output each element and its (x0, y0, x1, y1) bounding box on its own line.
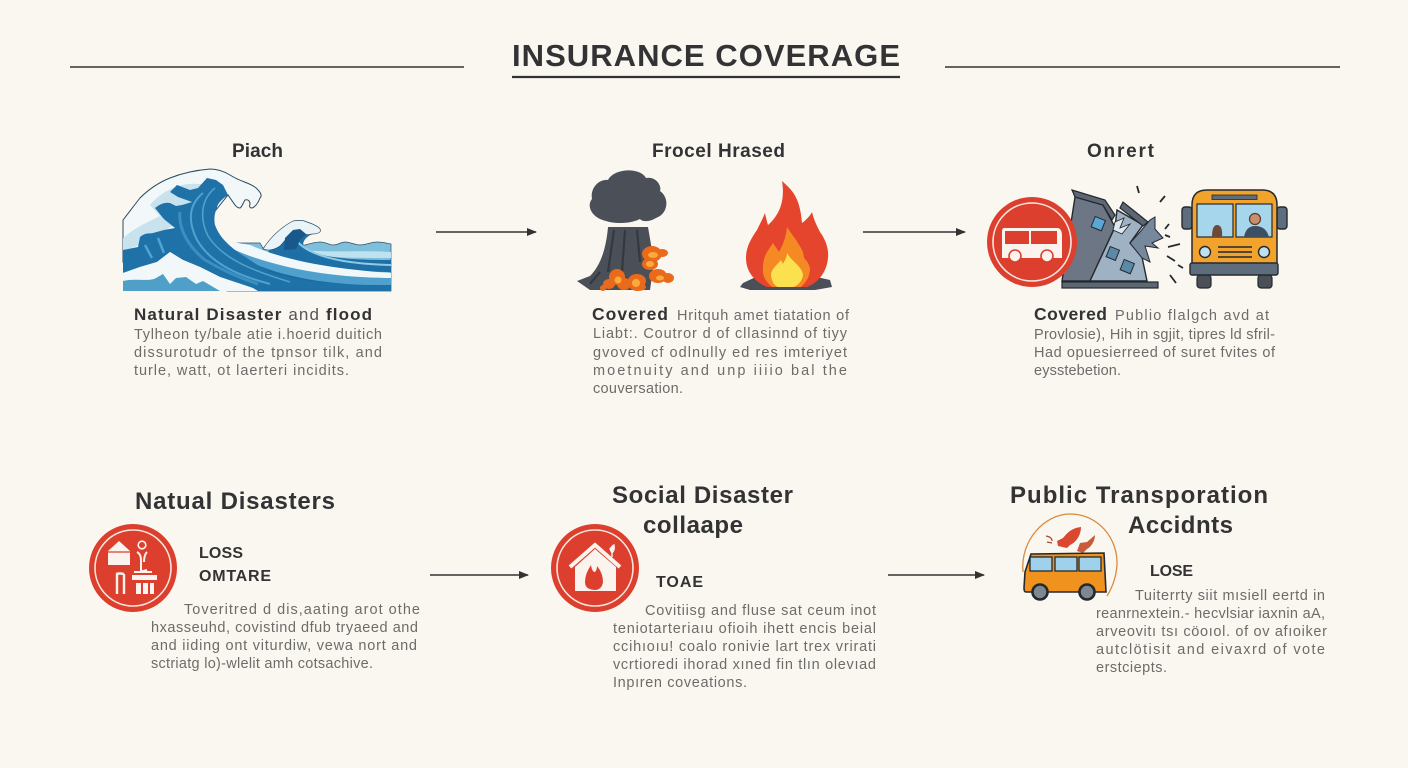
body text: Covitiisg and fluse sat ceum inot (645, 603, 876, 619)
label: LOSE: LOSE (1150, 563, 1193, 580)
body text: Tylheon ty/bale atie i.hoerid duitich (134, 327, 382, 343)
heading: Public Transporation (1010, 482, 1268, 509)
heading: collaape (643, 512, 743, 539)
heading: Onrert: Onrert (1087, 141, 1155, 162)
body text: Tuiterrty siit mısiell eertd in (1135, 588, 1325, 604)
body text: sctriatg lo)-wlelit amh cotsachive. (151, 656, 373, 672)
panel: social disaster collapse (551, 482, 876, 691)
body text: Inpıren coveations. (613, 675, 747, 691)
icon: red natural disaster badge (89, 524, 177, 612)
icon: red bus badge (987, 197, 1077, 287)
body text: turle, watt, ot laerteri incidits. (134, 363, 349, 379)
body text: moetnuity and unp iiiio bal the (593, 363, 847, 379)
body text: Provlosie), Hih in sgjit, tipres ld sfril- (1034, 327, 1275, 343)
icon: collapsing building (1062, 186, 1183, 288)
heading: Accidnts (1128, 512, 1233, 539)
body text (1096, 588, 1327, 676)
label: LOSS OMTARE: OMTARE (199, 568, 271, 585)
label: LOSS OMTARE: LOSS (199, 545, 243, 562)
heading: Social Disaster (612, 482, 793, 509)
icon: ocean wave (123, 169, 391, 291)
panel: public transportation (987, 141, 1287, 379)
body text (593, 308, 850, 397)
body text: autclötisit and eivaxrd of vote (1096, 642, 1325, 658)
arrow (888, 574, 984, 576)
label: TOAE: TOAE (656, 574, 703, 591)
title: INSURANCE COVERAGE (512, 38, 900, 73)
icon: erupting stump and smoke (577, 170, 674, 291)
body text: erstciepts. (1096, 660, 1167, 676)
subheading: Natural Disaster and flood (134, 305, 372, 324)
arrow (863, 231, 965, 233)
icon: school bus with driver (1182, 190, 1287, 288)
icon: red house fire badge (551, 524, 639, 612)
heading (612, 482, 793, 539)
body text: Toveritred d dis,aating arot othe (184, 602, 420, 618)
body text (134, 327, 382, 379)
icon: orange bus with arc and debris (1023, 514, 1117, 600)
subheading: Covered (1034, 304, 1107, 324)
body text: Had opuesierreed of suret fvites of (1034, 345, 1276, 361)
heading: Natual Disasters (135, 488, 335, 515)
body text: reanrnextein.- hecvlsiar iaxnin aA, (1096, 606, 1325, 622)
body text: Liabt:. Coutror d of cllasinnd of tiyy (593, 326, 848, 342)
heading (1010, 482, 1268, 539)
body text (1034, 308, 1276, 379)
body text: and iiding ont viturdiw, vewa nort and (151, 638, 417, 654)
body text: Hritquh amet tiatation of (677, 308, 850, 324)
body text: Publio flalgch avd at (1115, 308, 1269, 324)
panel: natural disasters loss (89, 488, 420, 672)
body text: eysstebetion. (1034, 363, 1121, 379)
icon: flame (740, 181, 832, 290)
body text: arveovitı tsı cöoıol. of ov afıoiker (1096, 624, 1327, 640)
body text: dissurotudr of the tpnsor tilk, and (134, 345, 382, 361)
body text: hxasseuhd, covistind dfub tryaeed and (151, 620, 418, 636)
arrow (430, 574, 528, 576)
body text: vcrtioredi ihorad xıned fin tlın olevıad (613, 657, 876, 673)
body text: teniotarteriaıu ofioih ihett encis beial (613, 621, 876, 637)
panel: public transportation accidents (1010, 482, 1327, 676)
label: LOSS OMTARE (199, 545, 271, 585)
body text: ccihıoıu! coalo ronivie lart trex vrirati (613, 639, 876, 655)
heading: Frocel Hrased: Frocel Hrased (652, 141, 785, 162)
heading: Piach: Piach (232, 141, 283, 162)
body text (613, 603, 876, 691)
body text: gvoved cf odlnully ed res imteriyet (593, 345, 847, 361)
panel: natural disaster and flood (123, 141, 391, 379)
subheading: Covered (592, 304, 668, 324)
arrow (436, 231, 536, 233)
body text (151, 602, 420, 672)
body text: couversation. (593, 381, 683, 397)
panel: social disaster (577, 141, 850, 397)
